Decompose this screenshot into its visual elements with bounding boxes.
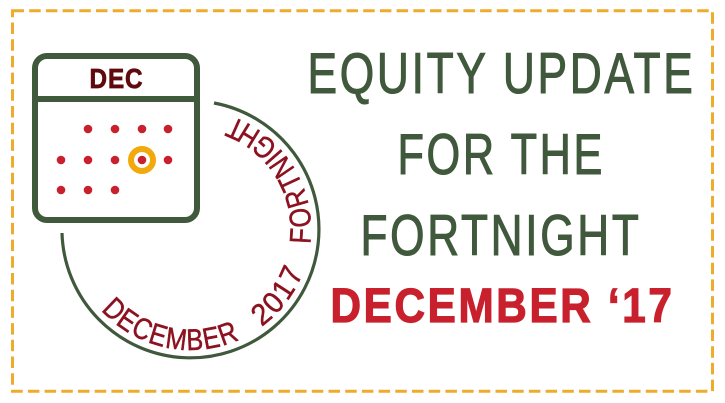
arc word: December: [96, 291, 242, 357]
circular text: [96, 110, 318, 357]
arc word: December: D: [96, 291, 133, 328]
calendar frame: [35, 56, 197, 220]
arc word: December: E: [145, 316, 171, 353]
title: [308, 42, 696, 268]
subtitle date: DECEMBER ‘17: [330, 280, 674, 333]
arc word: December: E: [111, 301, 144, 339]
arc word: 2017: 0: [256, 286, 291, 320]
calendar header divider: [35, 96, 197, 102]
circular arc: [62, 103, 319, 358]
calendar date dots: [57, 125, 172, 194]
arc word: Fortnight: I: [259, 143, 289, 171]
arc word: Fortnight: R: [278, 185, 315, 212]
icon: calendar: [35, 56, 197, 220]
calendar month label: DEC: [90, 63, 144, 94]
arc word: December: B: [186, 323, 204, 357]
arc word: Fortnight: [221, 110, 318, 244]
arc word: December: R: [213, 314, 242, 352]
arc word: Fortnight: T: [272, 168, 309, 197]
arc word: 2017: [245, 261, 310, 332]
highlighted date ring: [131, 149, 153, 171]
title line 3: FORTNIGHT: [360, 204, 642, 268]
arc word: Fortnight: O: [282, 206, 318, 229]
arc word: December: E: [200, 320, 222, 356]
arc word: Fortnight: H: [232, 117, 265, 155]
arc word: December: M: [164, 321, 189, 357]
arc word: Fortnight: N: [263, 151, 301, 184]
arc word: 2017: 2: [245, 297, 278, 332]
arc word: Fortnight: F: [283, 227, 318, 244]
arc word: Fortnight: T: [221, 110, 249, 147]
arc word: Fortnight: G: [246, 128, 283, 166]
arc word: 2017: 1: [266, 274, 302, 306]
arc word: December: C: [127, 310, 158, 348]
title line 2: FOR THE: [398, 123, 605, 187]
arc word: 2017: 7: [274, 261, 310, 289]
